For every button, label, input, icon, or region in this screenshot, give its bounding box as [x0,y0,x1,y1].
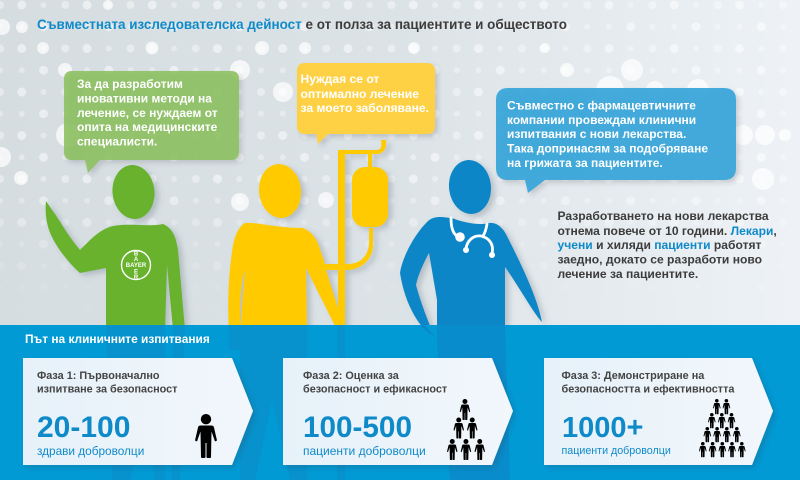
text block: development summary: Разработването на нови лекарства [558,209,769,223]
text block: development summary: отнема повече от 10 години. Лекари, [558,224,777,238]
figure overlap: doctor arm over band [420,325,435,337]
text block: development summary: лечение за пациентите. [558,267,698,281]
card: phase 1: Фаза 1: Първоначално [37,370,160,382]
card: phase 2: Фаза 2: Оценка за [303,370,400,382]
icon: group of many people [699,399,746,457]
speech bubble: yellow: оптимално лечение [300,87,419,101]
text block: development summary: заедно, докато се разработи ново [558,252,762,266]
speech bubble: yellow: Нуждая се от [300,72,379,86]
card: phase 1: здрави доброволци [37,444,144,458]
card: phase 1 [23,358,253,465]
speech bubble: green: опита на медицинските [77,120,218,134]
icon: one person [195,414,217,458]
icon: Bayer logo: B [134,252,139,258]
card: phase 3: пациенти доброволци [562,445,671,457]
card: phase 3: 1000+ [562,412,643,444]
text block: development summary: учени и хиляди пациенти работят [558,238,762,252]
card: phase 2: пациенти доброволци [303,444,426,458]
title: Съвместната изследователска дейност е от полза за пациентите и обществото [37,17,567,32]
band: clinical trials pathway [0,325,800,480]
icon: stethoscope [451,218,495,258]
figure: doctor with stethoscope [400,158,542,340]
card: phase 2: безопасност и ефикасност [303,384,448,396]
speech bubble: blue: на грижата за пациентите. [507,156,663,170]
card: phase 3 [544,358,773,465]
card: phase 1: 20-100 [37,411,130,444]
speech bubble: green: специалисти. [77,134,157,148]
icon: group of six people [447,399,485,460]
speech bubble: blue: Така допринасям за подобряване [507,142,708,156]
speech bubble: blue: Съвместно с фармацевтичните [507,98,696,112]
heading: pathway: Път на клиничните изпитвания [25,332,210,346]
speech bubble: yellow [297,63,435,144]
speech bubble: blue [496,88,736,193]
figure: Bayer employee [46,163,185,330]
card: phase 3: безопасността и ефективността [562,384,735,396]
speech bubble: green: лечение, се нуждаем от [77,106,218,120]
icon: Bayer logo: R [134,275,139,281]
card: phase 3: Фаза 3: Демонстриране на [562,370,705,382]
card: phase 2 [283,358,513,465]
background with dot pattern [0,0,800,325]
card: phase 1: изпитване за безопасност [37,384,178,396]
speech bubble: green [64,71,239,173]
icon: Bayer logo: A [134,257,139,263]
icon: Bayer logo: E [134,270,138,276]
icon: Bayer logo: BAYER [126,263,147,269]
speech bubble: yellow: за моето заболяване. [300,101,429,115]
speech bubble: green: иновативни методи на [77,92,212,106]
speech bubble: blue: изпитвания с нови лекарства. [507,127,686,141]
speech bubble: green: За да разработим [77,77,183,91]
text block: development summary [558,209,777,281]
card: phase 2: 100-500 [303,411,412,444]
icon: Bayer logo [122,250,150,281]
speech bubble: blue: компании провеждам клинични [507,113,696,127]
figure: patient with IV drip [228,140,388,330]
